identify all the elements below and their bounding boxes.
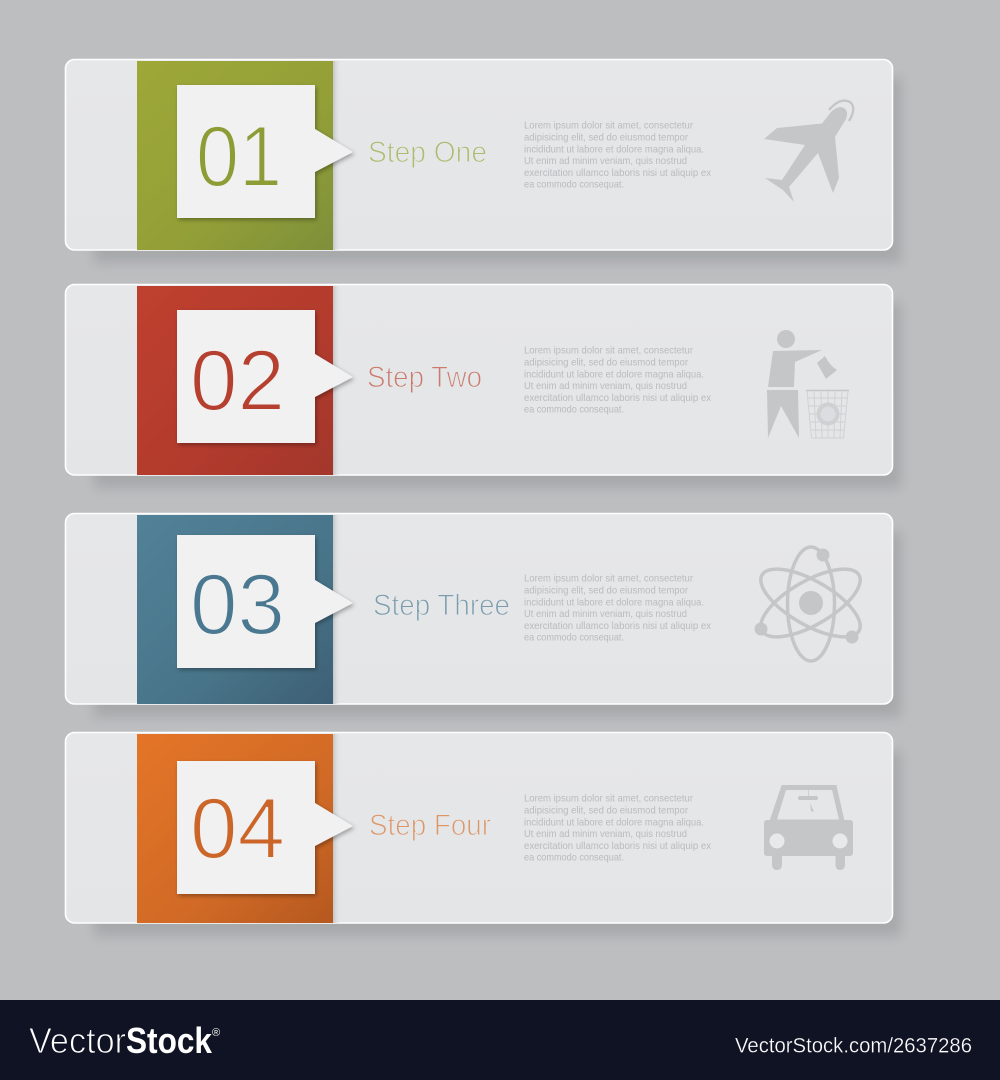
body text: Lorem ipsum dolor sit amet, consectetur [524, 346, 693, 357]
body text: adipisicing elit, sed do eiusmod tempor [524, 806, 688, 816]
body text: incididunt ut labore et dolore magna aliqua. [524, 597, 704, 608]
card [66, 732, 892, 923]
body text: incididunt ut labore et dolore magna aliqua. [524, 144, 704, 155]
body text: incididunt ut labore et dolore magna aliqua. [524, 817, 704, 828]
colour band [137, 61, 341, 250]
footer bar [0, 1000, 1000, 1080]
body text: Ut enim ad minim veniam, quis nostrud [524, 156, 687, 167]
body text: Lorem ipsum dolor sit amet, consectetur [524, 121, 693, 132]
logo: Stock [126, 1020, 213, 1061]
body text: incididunt ut labore et dolore magna aliqua. [524, 369, 704, 380]
panel: step two [66, 284, 892, 475]
step label: Step Two [367, 361, 482, 394]
logo: Vector [29, 1020, 126, 1061]
body text [524, 794, 712, 864]
number tag [177, 310, 353, 443]
number tag [177, 85, 353, 218]
body text: ea commodo consequat. [524, 405, 624, 416]
body text: adipisicing elit, sed do eiusmod tempor [524, 132, 688, 144]
colour band [137, 515, 341, 704]
icon: person recycling litter [767, 330, 849, 438]
body text: exercitation ullamco laboris nisi ut aliquip ex [524, 168, 712, 179]
card [66, 514, 892, 704]
step label: Step Four [369, 809, 491, 842]
body text: exercitation ullamco laboris nisi ut aliquip ex [524, 621, 712, 632]
number 04: 04 [190, 781, 285, 877]
panel: step three [66, 514, 892, 704]
body text: ea commodo consequat. [524, 180, 624, 191]
body text: Ut enim ad minim veniam, quis nostrud [524, 829, 687, 840]
body text: exercitation ullamco laboris nisi ut aliquip ex [524, 841, 712, 852]
body text: ea commodo consequat. [524, 633, 624, 644]
colour band [137, 286, 341, 475]
body text: exercitation ullamco laboris nisi ut aliquip ex [524, 393, 712, 404]
icon: car [764, 786, 853, 870]
card [66, 284, 892, 475]
number 01: 01 [196, 109, 282, 205]
body text: ea commodo consequat. [524, 853, 624, 864]
colour band [137, 734, 341, 923]
body text: Ut enim ad minim veniam, quis nostrud [524, 609, 687, 620]
logo [29, 1020, 220, 1061]
body text: adipisicing elit, sed do eiusmod tempor [524, 586, 688, 596]
step label: Step Three [373, 589, 510, 622]
step label: Step One [368, 136, 487, 169]
panel: step one [66, 60, 892, 250]
number tag [177, 535, 353, 668]
body text [524, 121, 712, 191]
number 03: 03 [190, 557, 285, 653]
body text: Lorem ipsum dolor sit amet, consectetur [524, 794, 693, 805]
body text: Lorem ipsum dolor sit amet, consectetur [524, 574, 693, 585]
body text: adipisicing elit, sed do eiusmod tempor [524, 358, 688, 368]
number 02: 02 [190, 333, 285, 429]
icon: atom [751, 547, 870, 661]
card [66, 60, 892, 250]
panel: step four [66, 732, 892, 923]
body text [524, 346, 712, 416]
body text [524, 574, 712, 644]
logo: ® [212, 1027, 220, 1039]
icon: airplane [764, 101, 853, 202]
image id: VectorStock.com/2637286 [735, 1035, 972, 1058]
body text: Ut enim ad minim veniam, quis nostrud [524, 381, 687, 392]
number tag [177, 761, 353, 894]
